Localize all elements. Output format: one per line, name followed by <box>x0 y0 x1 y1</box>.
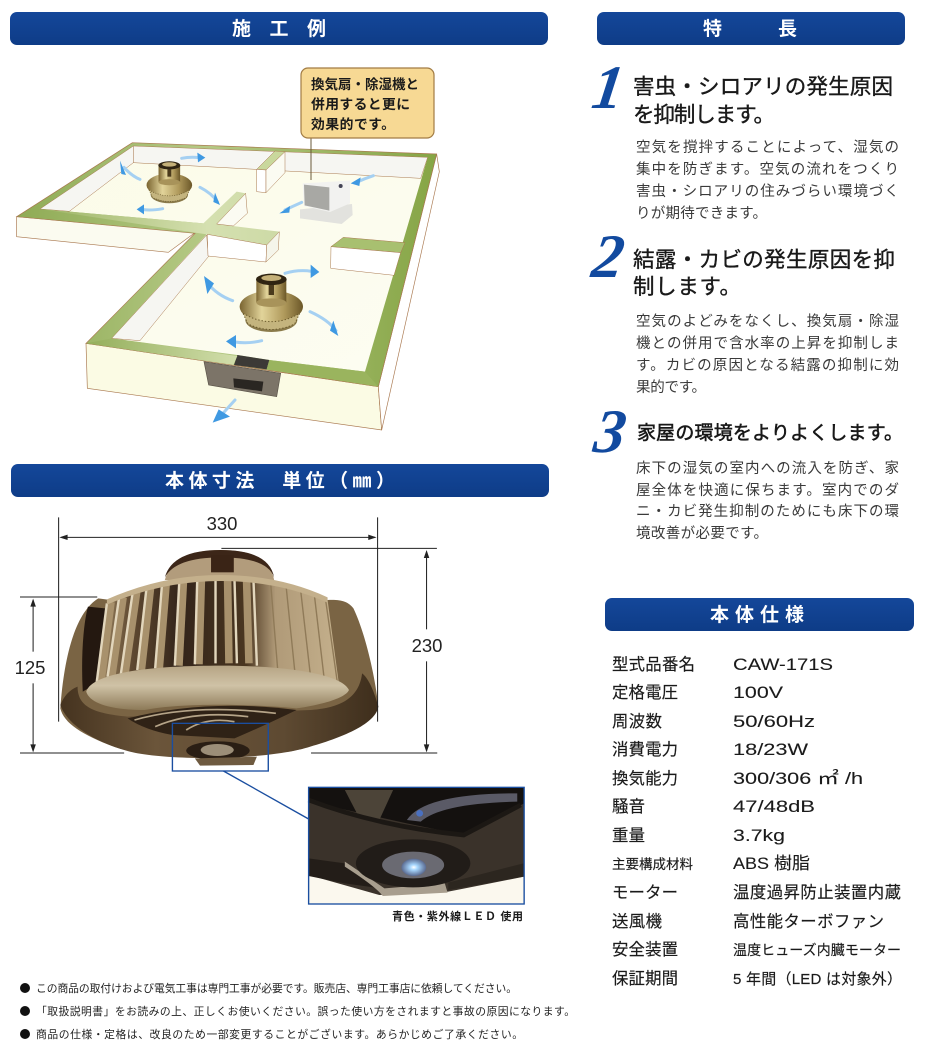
dimension: 330: 330 <box>207 513 237 534</box>
callout: 換気扇・除湿機と併用: 併用すると更に <box>311 96 410 112</box>
inset LED photo <box>309 787 524 904</box>
feature 2: 機との併用で含水率の上昇を抑制しま <box>636 335 899 352</box>
spec table: 主要構成材料 <box>612 857 694 872</box>
room floor <box>40 146 428 372</box>
feature 1: 空気を撹拌することによって、湿気の <box>636 139 899 156</box>
feature 1: 1 <box>588 53 629 122</box>
spec table: 騒音 <box>612 798 645 816</box>
caption: LED: 青色・紫外線ＬＥＤ 使用 <box>392 909 523 923</box>
spec table: 5 年間（LED は対象外） <box>733 971 902 988</box>
feature 2: 制します。 <box>633 275 741 299</box>
feature 1: りが期待できます。 <box>636 205 767 222</box>
callout: 換気扇・除湿機と併用: 効果的です。 <box>311 116 395 132</box>
dimension lines <box>20 517 437 753</box>
spec table: 換気能力 <box>612 770 678 788</box>
feature 3 <box>589 397 903 542</box>
notes: 商品の仕様・定格は、改良のため一部変更することがございます。あらかじめご了承ください。 <box>36 1027 523 1041</box>
ventilation fan: lower room <box>240 274 303 332</box>
feature 3: 屋全体を快適に保ちます。室内でのダ <box>636 482 899 499</box>
feature 1: 害虫・シロアリの発生原因 <box>633 75 893 99</box>
spec table: 3.7kg <box>733 826 785 845</box>
header: 本体寸法 単位(mm): 本体寸法 単位（㎜） <box>165 470 395 492</box>
callout: 換気扇・除湿機と併用 <box>301 68 434 180</box>
ventilation fan: upper room <box>147 161 192 203</box>
green wall tops <box>17 143 437 387</box>
notes: この商品の取付けおよび電気工事は専門工事が必要です。販売店、専門工事店に依頼してください。 <box>36 981 517 995</box>
spec table <box>612 655 902 988</box>
fan lower body <box>60 673 378 758</box>
feature 3: ニ・カビ発生抑制のためにも床下の環 <box>636 503 899 520</box>
feature 3: 境改善が必要です。 <box>636 525 768 542</box>
main fan product drawing <box>20 517 524 904</box>
spec table: 型式品番名 <box>612 656 695 674</box>
header: 本体仕様: 本体仕様 <box>710 604 804 626</box>
feature 3: 家屋の環境をよりよくします。 <box>637 422 903 444</box>
interior partitions <box>40 151 405 275</box>
spec table: 47/48dB <box>733 797 815 816</box>
floor plan illustration <box>17 143 439 430</box>
dimension: 125: 125 <box>15 657 45 678</box>
header: 特長 <box>597 12 905 45</box>
header: 本体寸法 単位(mm) <box>11 464 549 497</box>
feature 3: 床下の湿気の室内への流入を防ぎ、家 <box>636 460 899 477</box>
fan grille with slats <box>96 575 339 683</box>
interior wall faces <box>40 146 428 341</box>
header: 施工例: 施工例 <box>232 18 326 40</box>
feature 2: 果的です。 <box>636 379 706 396</box>
spec table: 重量 <box>612 827 645 845</box>
spec table: 定格電圧 <box>612 684 678 702</box>
spec table: 温度ヒューズ内臓モーター <box>733 942 901 958</box>
feature 1: 害虫・シロアリの住みづらい環境づく <box>636 183 899 200</box>
spec table: CAW-171S <box>733 655 833 674</box>
notes <box>20 981 575 1041</box>
header: 本体仕様 <box>605 598 914 631</box>
feature 1: 集中を防ぎます。空気の流れをつくり <box>636 161 899 178</box>
spec table: モーター <box>612 884 678 902</box>
notes: 「取扱説明書」をお読みの上、正しくお使いください。誤った使い方をされますと事故の原因になります。 <box>36 1004 575 1018</box>
front wall faces <box>17 154 439 430</box>
fan hub <box>186 741 257 766</box>
spec table: 18/23W <box>733 740 808 759</box>
spec table: 消費電力 <box>612 741 678 759</box>
feature 3: 3 <box>589 397 631 466</box>
spec table: 送風機 <box>612 913 662 931</box>
fan side highlights <box>82 607 105 692</box>
spec table: 保証期間 <box>612 970 678 988</box>
blue detail box and leader <box>172 723 309 819</box>
spec table: 温度過昇防止装置内蔵 <box>733 884 901 902</box>
airflow arrows <box>124 157 373 417</box>
spec table: 安全装置 <box>612 941 678 959</box>
header: 特長: 特長 <box>703 18 797 40</box>
header: 施工例 <box>10 12 548 45</box>
feature 1 <box>588 53 899 222</box>
callout: 換気扇・除湿機と併用: 換気扇・除湿機と <box>311 76 419 92</box>
feature 2: 空気のよどみをなくし、換気扇・除湿 <box>636 313 899 330</box>
spec table: 周波数 <box>612 713 662 731</box>
fan top motor dome <box>165 550 274 580</box>
spec table: 100V <box>733 683 784 702</box>
dehumidifier unit <box>300 181 353 224</box>
spec table: 50/60Hz <box>733 712 815 731</box>
feature 1: を抑制します。 <box>633 103 775 127</box>
feature 2: 結露・カビの発生原因を抑 <box>633 248 895 272</box>
dimension: 230: 230 <box>412 635 442 656</box>
spec table: 高性能ターボファン <box>733 913 884 931</box>
feature 2: す。カビの原因となる結露の抑制に効 <box>636 357 899 374</box>
lower impeller <box>128 706 297 738</box>
feature 2 <box>587 222 899 396</box>
feature 2: 2 <box>587 222 629 291</box>
fan lip <box>86 666 349 710</box>
front opening with wall fan <box>86 338 378 397</box>
spec table: 300/306 ㎡ /h <box>733 769 863 788</box>
fan silhouette <box>60 598 378 757</box>
spec table: ABS 樹脂 <box>733 854 810 873</box>
